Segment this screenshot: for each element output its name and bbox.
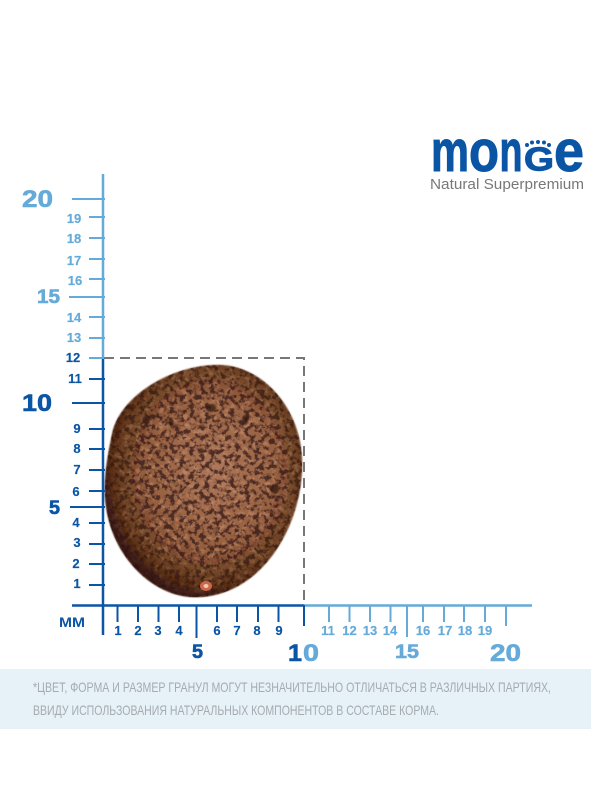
dark horizontal labels: 7 bbox=[233, 623, 241, 638]
light horizontal labels: 12 bbox=[342, 623, 357, 638]
dark vertical labels: 6 bbox=[72, 484, 80, 499]
dark vertical labels: 5 bbox=[49, 498, 60, 519]
light horizontal labels: 0 bbox=[303, 640, 319, 667]
horizontal ruler bbox=[59, 605, 532, 667]
size guide dashed outline bbox=[104, 358, 304, 604]
logo crown stars bbox=[525, 140, 551, 147]
dark horizontal labels: 9 bbox=[275, 623, 283, 638]
light vertical labels: 20 bbox=[22, 186, 53, 213]
logo wordmark: n bbox=[500, 119, 522, 184]
logo wordmark: m bbox=[431, 119, 469, 184]
footnote band bbox=[0, 669, 591, 729]
light vertical labels: 18 bbox=[67, 231, 81, 246]
unit label: ММ bbox=[59, 614, 85, 630]
dark horizontal labels: 4 bbox=[175, 623, 183, 638]
dark vertical labels: 9 bbox=[73, 421, 81, 436]
band background bbox=[0, 669, 591, 729]
light horizontal labels: 17 bbox=[438, 623, 452, 638]
dark ticks bbox=[70, 379, 105, 585]
horizontal axis dark section bbox=[72, 604, 304, 607]
light vertical labels: 16 bbox=[68, 273, 82, 288]
dark vertical labels: 2 bbox=[72, 556, 80, 571]
light vertical labels bbox=[22, 186, 82, 345]
light horizontal labels: 11 bbox=[321, 623, 335, 638]
vertical axis dark section bbox=[102, 358, 104, 635]
dark horizontal labels: 5 bbox=[192, 642, 203, 663]
dark vertical labels: 10 bbox=[22, 390, 52, 417]
dark ticks bbox=[118, 605, 304, 638]
dark horizontal labels: 2 bbox=[134, 623, 142, 638]
logo wordmark: e bbox=[554, 119, 584, 184]
light vertical labels: 15 bbox=[37, 287, 60, 308]
light horizontal labels bbox=[303, 623, 521, 667]
vertical axis light section bbox=[102, 174, 104, 358]
footnote line 2: ВВИДУ ИСПОЛЬЗОВАНИЯ НАТУРАЛЬНЫХ КОМПОНЕНТОВ В СОСТАВЕ КОРМА. bbox=[33, 702, 439, 718]
light vertical labels: 17 bbox=[67, 253, 81, 268]
dark horizontal labels: 6 bbox=[213, 623, 221, 638]
dark vertical labels: 12 bbox=[66, 350, 80, 365]
dark vertical labels: 4 bbox=[72, 515, 80, 530]
kibble photograph illustration bbox=[105, 365, 302, 597]
horizontal axis light section bbox=[304, 604, 532, 607]
light horizontal labels: 20 bbox=[490, 640, 521, 667]
light ticks bbox=[329, 605, 506, 637]
dark vertical labels: 1 bbox=[73, 576, 81, 591]
logo wordmark: o bbox=[469, 119, 499, 184]
light horizontal labels: 18 bbox=[458, 623, 472, 638]
light vertical labels: 14 bbox=[67, 310, 82, 325]
dark horizontal labels: 1 bbox=[114, 623, 122, 638]
logo tagline: Natural Superpremium bbox=[430, 176, 584, 193]
light vertical labels: 13 bbox=[67, 330, 81, 345]
logo wordmark: G bbox=[524, 140, 554, 178]
light ticks bbox=[69, 199, 105, 358]
light horizontal labels: 15 bbox=[395, 642, 419, 663]
vertical ruler bbox=[22, 174, 105, 635]
dark horizontal labels bbox=[114, 623, 302, 667]
bright fleck bbox=[200, 581, 212, 591]
dark vertical labels: 7 bbox=[73, 462, 81, 477]
dark vertical labels: 3 bbox=[73, 535, 81, 550]
dark vertical labels: 11 bbox=[68, 371, 82, 386]
dark horizontal labels: 8 bbox=[253, 623, 261, 638]
light horizontal labels: 16 bbox=[416, 623, 430, 638]
dark vertical labels bbox=[22, 350, 82, 591]
brand logo bbox=[430, 119, 584, 193]
dark horizontal labels: 1 bbox=[288, 640, 302, 667]
light horizontal labels: 13 bbox=[363, 623, 377, 638]
logo wordmark bbox=[431, 119, 584, 184]
light horizontal labels: 19 bbox=[478, 623, 492, 638]
dark horizontal labels: 3 bbox=[154, 623, 162, 638]
dark vertical labels: 8 bbox=[73, 441, 81, 456]
light vertical labels: 19 bbox=[67, 211, 81, 226]
light horizontal labels: 14 bbox=[383, 623, 398, 638]
